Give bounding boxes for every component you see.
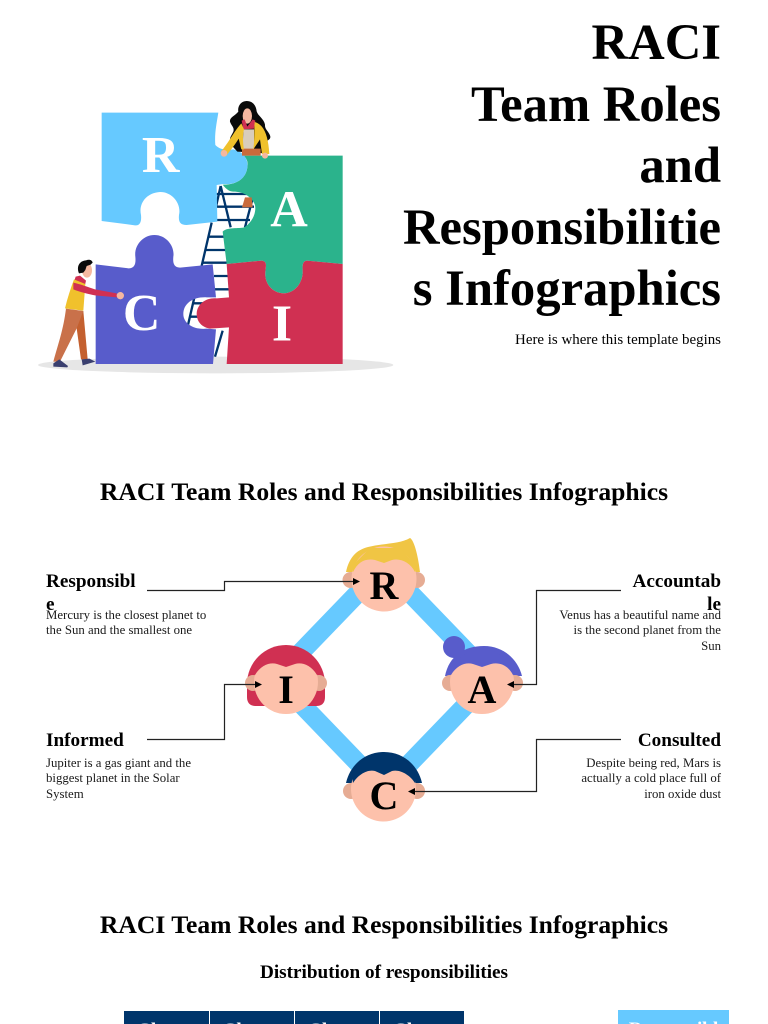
label: Accountable: Accountab	[633, 571, 721, 592]
head: A	[442, 636, 523, 714]
arrow: Accountable to A	[507, 590, 621, 688]
head: R	[342, 538, 425, 612]
text: Accountable: Sun	[701, 639, 721, 653]
label: Consulted: Consulted	[638, 730, 721, 751]
text: Consulted: actually a cold place full of	[581, 771, 721, 785]
text: Informed	[46, 756, 191, 801]
heading: table section: RACI Team Roles and Responsibilities Infographics	[100, 910, 668, 939]
table caption: Distribution of responsibilities	[260, 962, 508, 983]
head: R: R	[370, 563, 400, 608]
piece: C purple: C	[123, 285, 160, 342]
head: C: C	[370, 773, 398, 818]
text: Informed: Jupiter is a gas giant and the	[46, 756, 191, 770]
head: I: I	[278, 667, 294, 712]
title: Team Roles	[471, 76, 721, 132]
person: woman on top	[221, 101, 270, 207]
diamond connector	[276, 566, 492, 790]
legend: Responsible	[618, 1010, 729, 1024]
label: Accountable: le	[707, 594, 721, 615]
text: Accountable	[559, 608, 721, 653]
text: Responsible	[46, 608, 206, 637]
RACI diagram	[147, 538, 621, 822]
piece: R blue	[102, 113, 247, 225]
piece: R blue: R	[142, 127, 180, 184]
label: Responsible	[46, 571, 136, 615]
heading: diagram section: RACI Team Roles and Responsibilities Infographics	[100, 477, 668, 506]
piece: I red	[197, 261, 343, 364]
arrow: Informed to I	[147, 681, 262, 740]
puzzle illustration	[38, 101, 394, 374]
text: Responsible: the Sun and the smallest one	[46, 623, 192, 637]
head: A: A	[468, 667, 497, 712]
ladder	[188, 186, 254, 357]
text: Informed: System	[46, 787, 84, 801]
piece: C purple	[96, 235, 216, 364]
arrow: Responsible to R	[147, 578, 360, 590]
label: Accountable	[632, 571, 721, 615]
arrow: Consulted to C	[408, 740, 621, 795]
text: Consulted: Despite being red, Mars is	[586, 756, 721, 770]
label: Responsible: e	[46, 594, 55, 615]
title	[403, 14, 721, 316]
title: and	[639, 137, 721, 193]
text: Consulted: iron oxide dust	[644, 787, 721, 801]
head: I	[245, 645, 327, 714]
title: Responsibilitie	[403, 199, 721, 255]
text: Responsible: Mercury is the closest planet to	[46, 608, 206, 622]
text: Informed: biggest planet in the Solar	[46, 771, 180, 785]
label: Informed: Informed	[46, 730, 124, 751]
title: RACI	[592, 14, 721, 70]
text: Consulted	[581, 756, 721, 801]
piece: A green	[223, 156, 343, 293]
head: C	[343, 752, 425, 822]
piece: A green: A	[270, 182, 308, 239]
person: man pushing	[53, 260, 124, 367]
text: Accountable: Venus has a beautiful name and	[559, 608, 721, 622]
label: Responsible: Responsibl	[46, 571, 136, 592]
piece: I red: I	[272, 296, 292, 353]
ground shadow	[38, 357, 393, 373]
subtitle: Here is where this template begins	[515, 332, 721, 348]
text: Accountable: is the second planet from the	[574, 623, 721, 637]
title: s Infographics	[413, 260, 721, 316]
